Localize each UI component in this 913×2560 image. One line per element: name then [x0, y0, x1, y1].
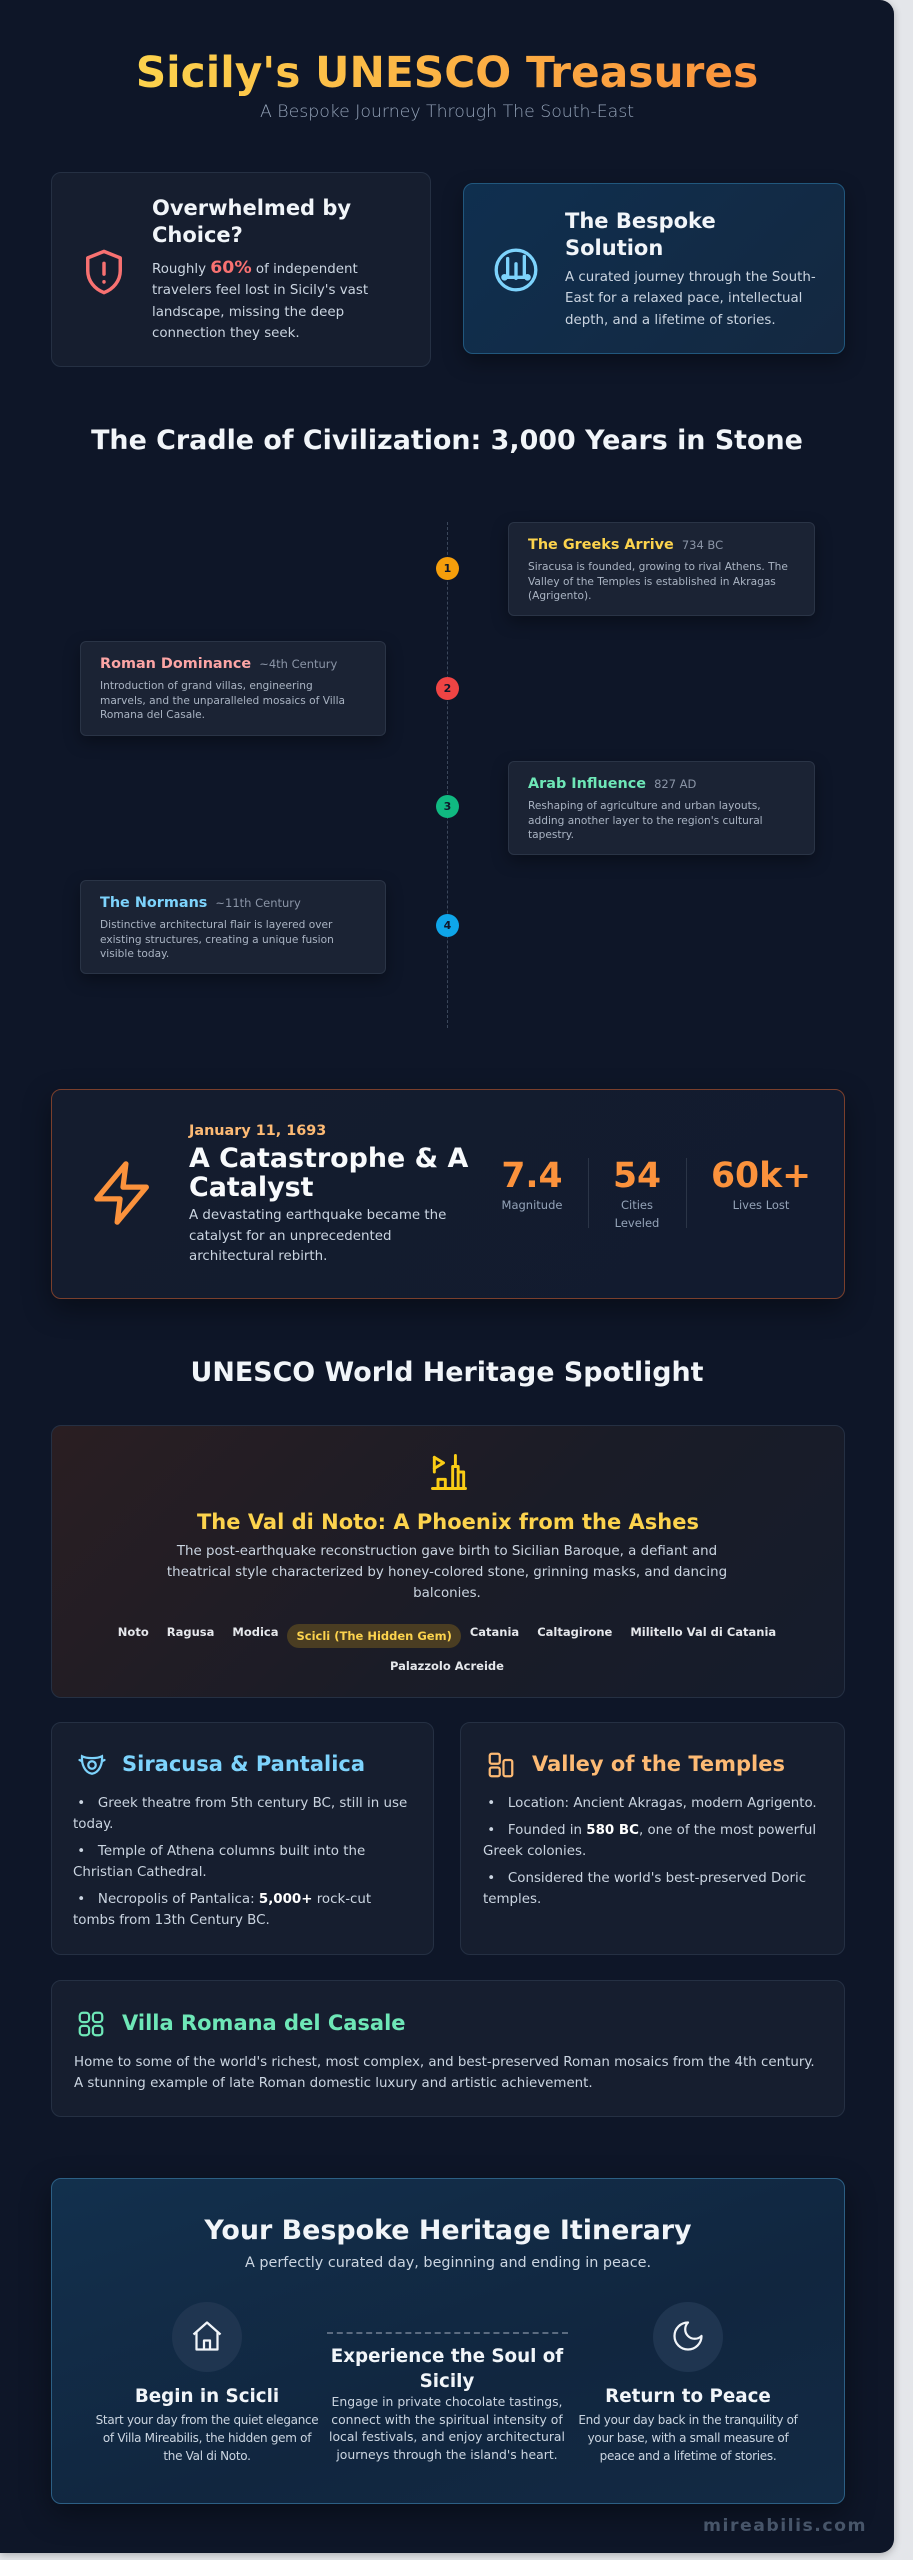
panel: solution [463, 183, 845, 354]
stat: cities [613, 1156, 661, 1230]
panel: val di noto [51, 1425, 845, 1698]
timeline marker 1: 1 [444, 562, 451, 575]
panel: siracusa: Siracusa & Pantalica [122, 1752, 365, 1776]
dashed connector [327, 2332, 568, 2334]
watermark: mireabilis.com [703, 2516, 867, 2536]
valley bullets: • Considered the world's best-preserved Doric temples. [483, 1871, 806, 1907]
panel: villa romana [51, 1980, 845, 2117]
timeline card: arabs: Arab Influence 827 AD [528, 776, 696, 792]
solution heading: The Bespoke Solution [565, 209, 716, 260]
valley bullets [483, 1796, 817, 1907]
city tags: Catania [470, 1625, 519, 1639]
stat: magnitude: Magnitude [502, 1198, 562, 1212]
step: begin: the Val di Noto. [163, 2449, 251, 2463]
valley bullets: • Founded in 580 BC, one of the most powerful Greek colonies. [483, 1823, 816, 1859]
stat: cities: 54 [613, 1156, 661, 1196]
timeline card: normans [80, 880, 386, 974]
val di noto description: The post-earthquake reconstruction gave birth to Sicilian Baroque, a defiant and theatrical style characterized by honey-colored stone, grinning masks, and dancing balconies. [167, 1544, 727, 1601]
step: return: peace and a lifetime of stories. [600, 2449, 776, 2463]
step: begin: Begin in Scicli [135, 2386, 279, 2407]
panel: earthquake [51, 1089, 845, 1299]
stat: lives: Lives Lost [733, 1198, 789, 1212]
city tags: Modica [232, 1625, 278, 1639]
city tags: Scicli (The Hidden Gem) [296, 1629, 452, 1643]
stat: magnitude: 7.4 [501, 1156, 563, 1196]
icon: theatre mask [78, 1754, 106, 1775]
earthquake text [188, 1123, 468, 1264]
stat: cities: Leveled [615, 1216, 659, 1230]
stat: cities: Cities [621, 1198, 653, 1212]
step: begin: Start your day from the quiet elegance [96, 2413, 318, 2427]
earthquake text: January 11, 1693 [189, 1123, 326, 1139]
problem text: Roughly 60% of independent travelers feel lost in Sicily's vast landscape, missing the deep connection they seek. [152, 258, 368, 341]
itinerary subtitle: A perfectly curated day, beginning and ending in peace. [245, 2255, 651, 2271]
icon: mosaic grid [78, 2012, 104, 2036]
siracusa bullets: • Temple of Athena columns built into the Christian Cathedral. [73, 1844, 365, 1880]
step: begin: of Villa Mireabilis, the hidden gem of [103, 2431, 311, 2445]
panel: siracusa [51, 1722, 434, 1955]
panel: problem [51, 172, 431, 367]
itinerary title: Your Bespoke Heritage Itinerary [204, 2215, 692, 2246]
timeline marker 3: 3 [444, 800, 451, 813]
city tags: Militello Val di Catania [630, 1625, 776, 1639]
heading: UNESCO spotlight: UNESCO World Heritage Spotlight [190, 1357, 704, 1388]
icon: lightning bolt [94, 1161, 149, 1225]
step: begin [96, 2386, 318, 2463]
icon: shield warning [86, 250, 122, 294]
city tags [118, 1624, 776, 1673]
panel: valley of temples: Valley of the Temples [532, 1752, 785, 1776]
city tags: Ragusa [167, 1625, 214, 1639]
step: return: your base, with a small measure of [588, 2431, 788, 2445]
siracusa bullets [73, 1796, 407, 1928]
timeline card: romans [80, 641, 386, 736]
city tags: Palazzolo Acreide [390, 1659, 504, 1673]
city tags: Caltagirone [537, 1625, 612, 1639]
val di noto title: The Val di Noto: A Phoenix from the Ashes [197, 1510, 699, 1534]
timeline marker 4: 4 [444, 919, 451, 932]
problem heading: Overwhelmed by Choice? [152, 196, 351, 247]
icon: moon [653, 2302, 723, 2372]
timeline card: romans: Introduction of grand villas, engineering marvels, and the unparalleled mosaics of Villa Romana del Casale. [100, 680, 345, 721]
siracusa bullets: • Necropolis of Pantalica: 5,000+ rock-cut tombs from 13th Century BC. [73, 1892, 371, 1928]
valley bullets: • Location: Ancient Akragas, modern Agrigento. [487, 1796, 817, 1811]
villa text: Home to some of the world's richest, most complex, and best-preserved Roman mosaics from the 4th century. A stunning example of late Roman domestic luxury and artistic achievement. [74, 2055, 815, 2091]
panel: itinerary [51, 2178, 845, 2504]
icon: baroque town [431, 1454, 467, 1490]
step: experience [329, 2346, 565, 2462]
earthquake text: A Catastrophe & A Catalyst [189, 1143, 468, 1203]
heading: cradle of civilization: The Cradle of Civilization: 3,000 Years in Stone [91, 425, 803, 456]
earthquake text: A devastating earthquake became the catalyst for an unprecedented architectural rebirth. [189, 1208, 446, 1264]
timeline card: normans: Distinctive architectural flair is layered over existing structures, creating a unique fusion visible today. [100, 919, 334, 960]
timeline card: arabs [508, 761, 815, 855]
step: return: End your day back in the tranquility of [578, 2413, 798, 2427]
timeline card: romans: Roman Dominance ~4th Century [100, 656, 337, 672]
timeline marker 2 [436, 677, 459, 700]
panel: valley of temples [460, 1722, 845, 1955]
subtitle: A Bespoke Journey Through The South-East [260, 102, 634, 122]
step: experience: Engage in private chocolate tastings, connect with the spiritual intensity of local festivals, and enjoy architectural journeys through the island's heart. [329, 2394, 565, 2462]
panel: villa romana: Villa Romana del Casale [122, 2011, 406, 2035]
timeline card: greeks: The Greeks Arrive 734 BC [528, 537, 723, 553]
step: experience: Experience the Soul of Sicily [331, 2346, 563, 2392]
timeline marker 3 [436, 795, 459, 818]
step: return: Return to Peace [605, 2386, 771, 2407]
icon: house [172, 2302, 242, 2372]
timeline marker 2: 2 [444, 682, 451, 695]
timeline card: greeks [508, 522, 815, 616]
stat: lives: 60k+ [711, 1156, 811, 1196]
solution text: A curated journey through the South-East for a relaxed pace, intellectual depth, and a lifetime of stories. [565, 270, 816, 328]
timeline marker 1 [436, 557, 459, 580]
timeline [447, 522, 448, 1028]
title: Sicily's UNESCO Treasures [136, 48, 758, 97]
timeline marker 4 [436, 914, 459, 937]
icon: temples layout [488, 1752, 514, 1778]
icon: solution [494, 248, 538, 292]
city tags: Noto [118, 1625, 149, 1639]
timeline card: normans: The Normans ~11th Century [100, 895, 301, 911]
timeline card: greeks: Siracusa is founded, growing to rival Athens. The Valley of the Temples is established in Akragas (Agrigento). [528, 561, 788, 602]
step: return [578, 2386, 798, 2463]
siracusa bullets: • Greek theatre from 5th century BC, still in use today. [73, 1796, 407, 1832]
timeline card: arabs: Reshaping of agriculture and urban layouts, adding another layer to the region's cultural tapestry. [528, 800, 763, 841]
